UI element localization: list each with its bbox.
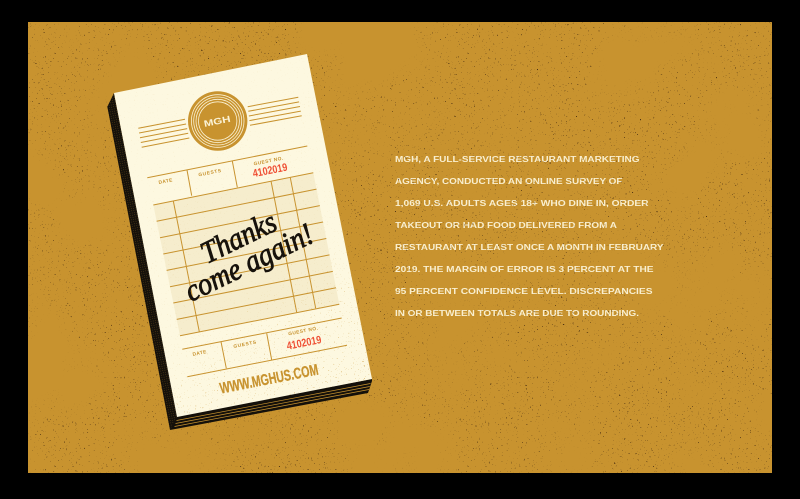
top ticket number: 4102019 <box>252 162 288 180</box>
shaded table background <box>153 173 339 336</box>
bottom form rules <box>182 318 347 377</box>
pad edge: stacked pages <box>170 379 372 430</box>
top label: guests: GUESTS <box>198 168 222 178</box>
bottom ticket number: 4102019 <box>286 334 322 353</box>
methodology text block: IN OR BETWEEN TOTALS ARE DUE TO ROUNDING. <box>395 308 639 318</box>
header lines right <box>248 97 302 125</box>
methodology text block <box>395 154 664 318</box>
paper sheet <box>114 54 372 417</box>
table rules <box>153 173 339 336</box>
message line: come again!: come again! <box>179 216 319 308</box>
bottom label: guests: GUESTS <box>233 340 257 350</box>
bottom label: date: DATE <box>192 349 208 358</box>
top form rules <box>147 146 307 196</box>
handwritten message <box>179 204 319 308</box>
methodology text block: MGH, A FULL-SERVICE RESTAURANT MARKETING <box>395 154 640 164</box>
bottom label: guest no.: GUEST NO. <box>288 326 318 337</box>
header lines left <box>138 119 189 147</box>
methodology text block: RESTAURANT AT LEAST ONCE A MONTH IN FEBRUARY <box>395 242 664 252</box>
logo text: MGH <box>203 114 231 129</box>
message line: Thanks: Thanks <box>195 204 282 270</box>
methodology text block: TAKEOUT OR HAD FOOD DELIVERED FROM A <box>395 220 618 230</box>
pad edge: left side <box>107 93 178 430</box>
receipt pad <box>100 50 380 430</box>
top label: date: DATE <box>158 177 174 186</box>
methodology text block: AGENCY, CONDUCTED AN ONLINE SURVEY OF <box>395 176 622 186</box>
logo badge <box>188 91 247 151</box>
top label: guest no.: GUEST NO. <box>253 156 284 167</box>
methodology text block: 1,069 U.S. ADULTS AGES 18+ WHO DINE IN, ORDER <box>395 198 649 208</box>
methodology text block: 95 PERCENT CONFIDENCE LEVEL. DISCREPANCIES <box>395 286 653 296</box>
website url: WWW.MGHUS.COM <box>218 362 320 398</box>
methodology text block: 2019. THE MARGIN OF ERROR IS 3 PERCENT AT THE <box>395 264 654 274</box>
